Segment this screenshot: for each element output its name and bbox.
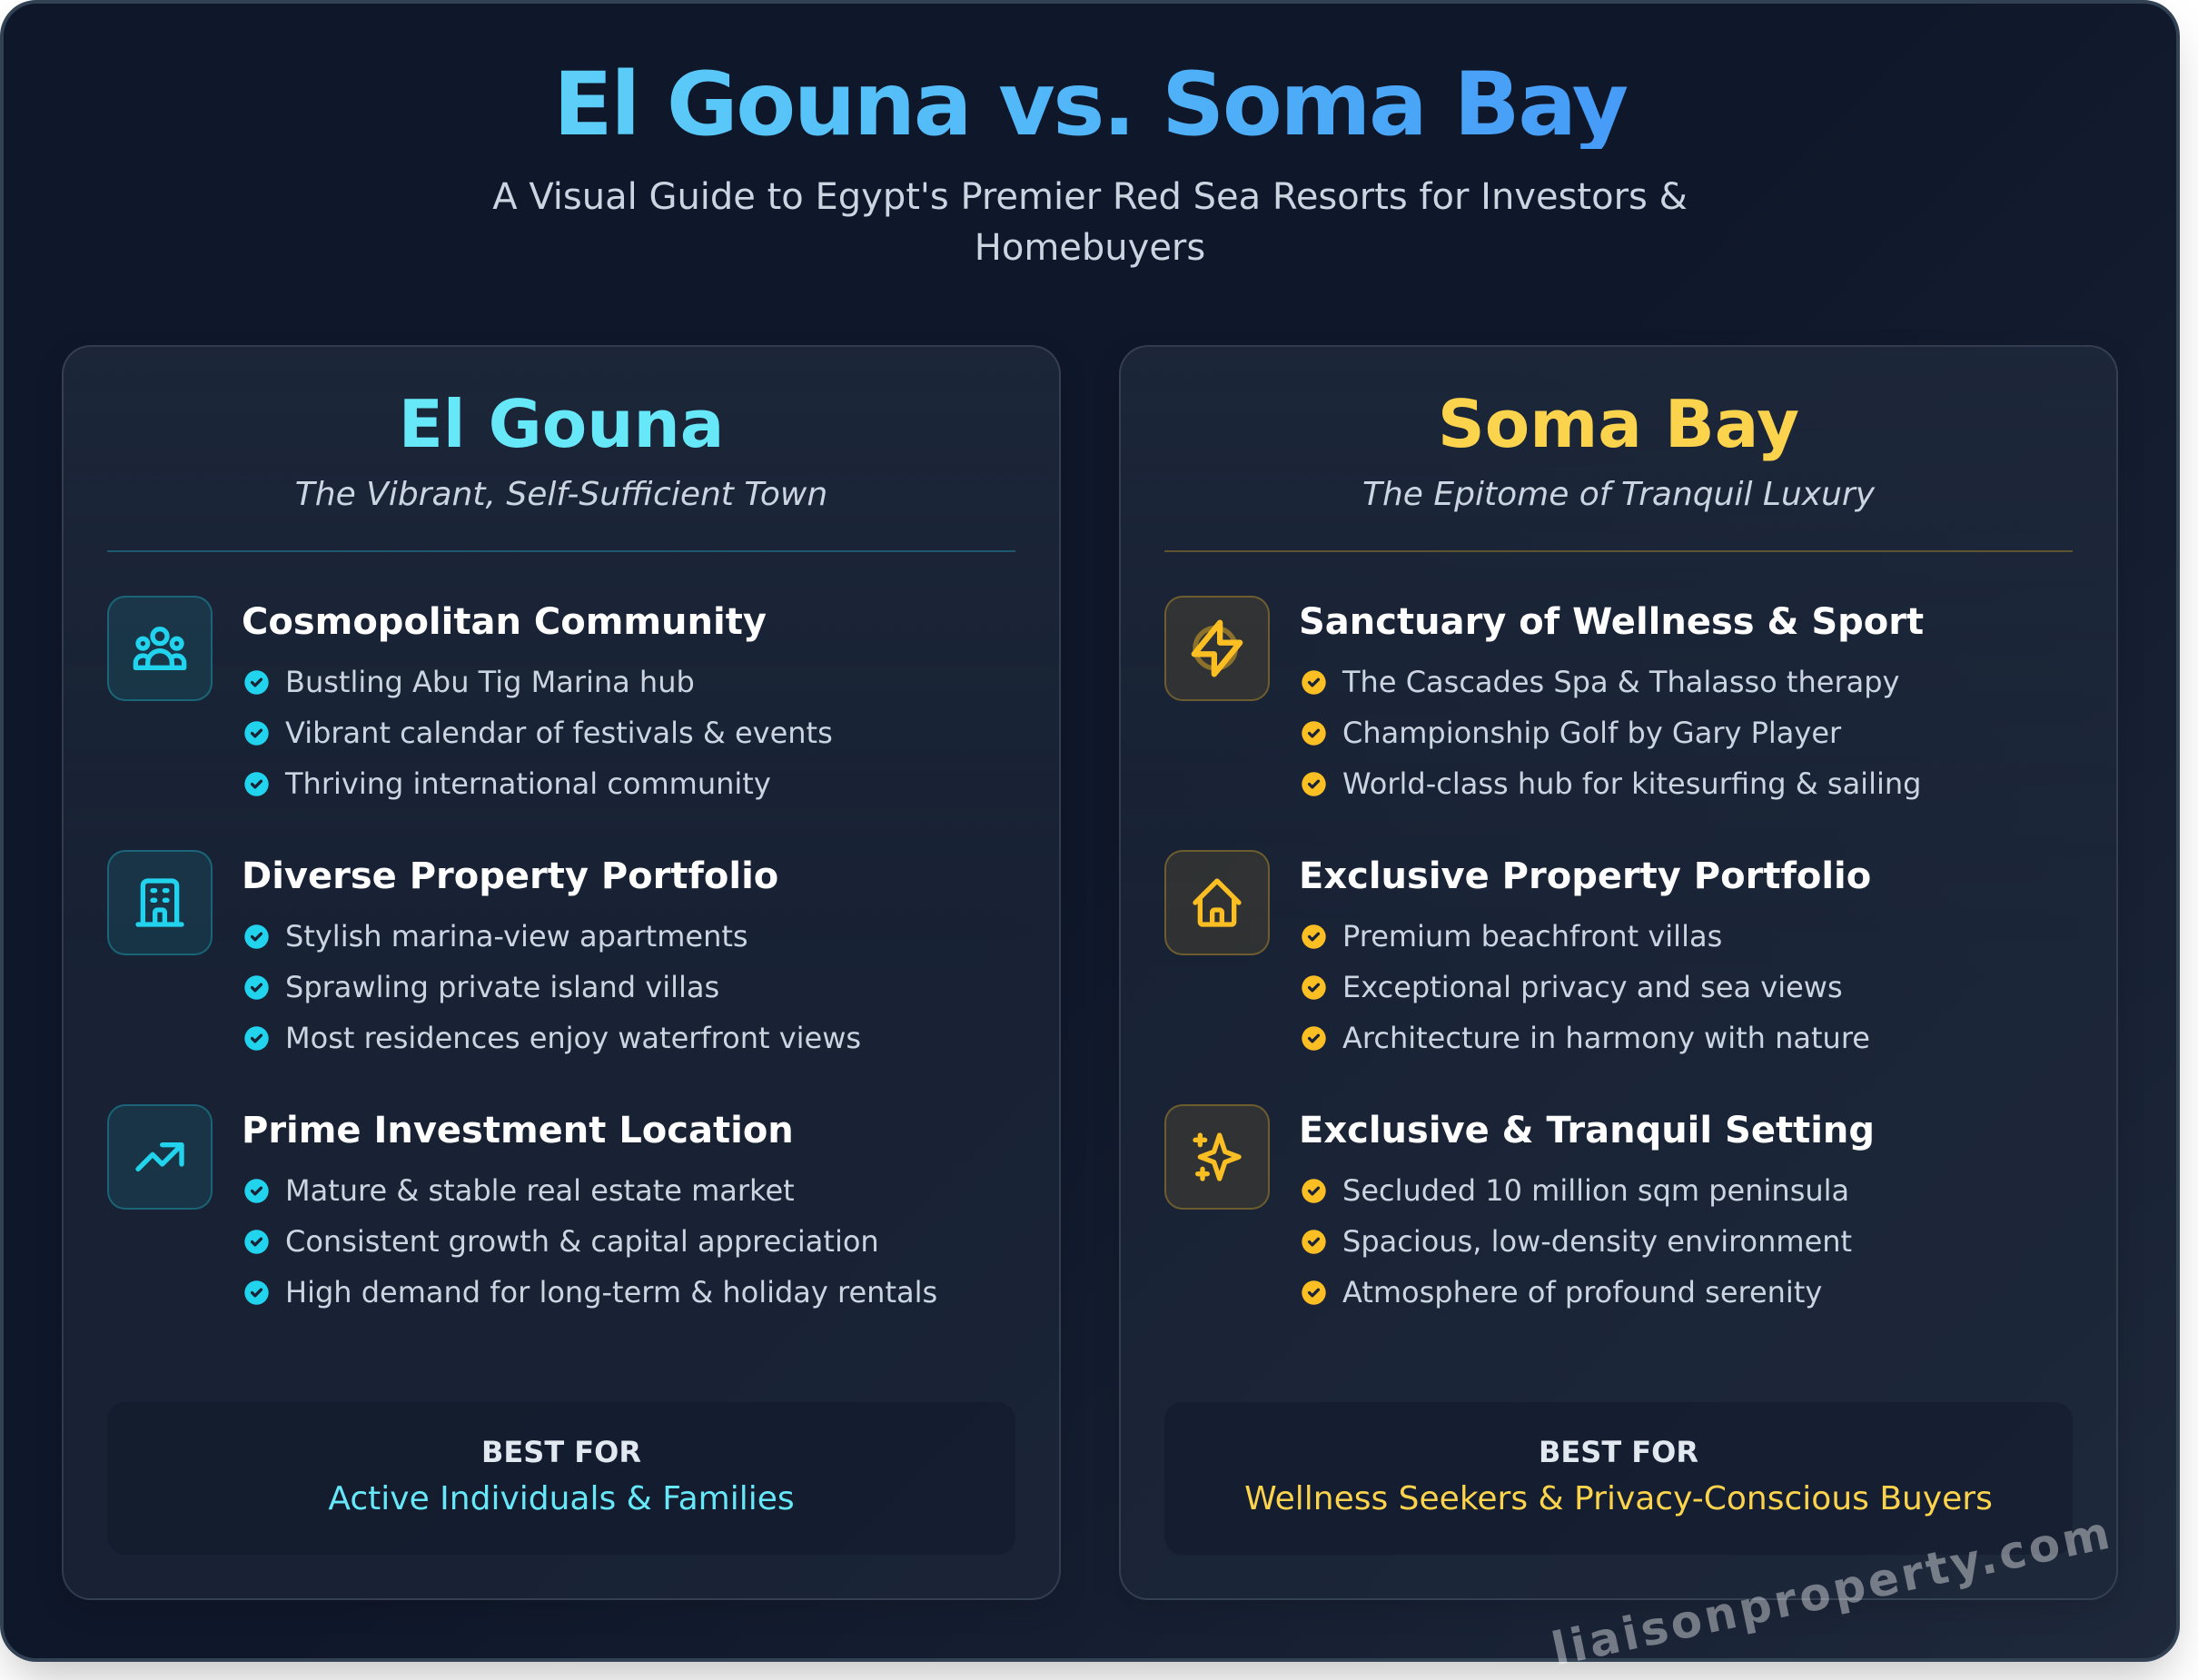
feature heading: Exclusive & Tranquil Setting: [1299, 1110, 1875, 1151]
list item: Most residences enjoy waterfront views: [285, 1021, 861, 1055]
list item: Exceptional privacy and sea views: [1342, 970, 1843, 1004]
feature: Exclusive Property Portfolio: [1164, 850, 1871, 1055]
callout: best for El Gouna: [107, 1402, 1015, 1555]
icon: trending up: [107, 1104, 213, 1210]
callout: best for Soma Bay: [1164, 1402, 2073, 1555]
callout label: BEST FOR: [1539, 1435, 1698, 1469]
list item: World-class hub for kitesurfing & sailing: [1342, 766, 1921, 801]
subtitle: Homebuyers: [975, 227, 1205, 269]
list item: Stylish marina-view apartments: [285, 919, 748, 954]
heading: Soma Bay: Soma Bay: [1438, 386, 1799, 462]
feature heading: Cosmopolitan Community: [242, 601, 767, 643]
list item: Bustling Abu Tig Marina hub: [285, 665, 695, 699]
list item: Sprawling private island villas: [285, 970, 719, 1004]
feature heading: Diverse Property Portfolio: [242, 855, 778, 897]
panel: Soma Bay: [1119, 345, 2118, 1600]
callout value: Wellness Seekers & Privacy-Conscious Buyers: [1244, 1480, 1993, 1517]
icon: lightning bolt: [1164, 596, 1270, 701]
list item: Vibrant calendar of festivals & events: [285, 716, 833, 750]
feature heading: Prime Investment Location: [242, 1110, 794, 1151]
icon: people: [107, 596, 213, 701]
feature: Sanctuary of Wellness & Sport: [1164, 596, 1924, 801]
icon: sparkles: [1164, 1104, 1270, 1210]
list item: Championship Golf by Gary Player: [1342, 716, 1841, 750]
callout label: BEST FOR: [481, 1435, 641, 1469]
list item: Spacious, low-density environment: [1342, 1224, 1852, 1259]
feature heading: Exclusive Property Portfolio: [1299, 855, 1871, 897]
title: El Gouna vs. Soma Bay: [553, 53, 1627, 154]
tagline: El Gouna: The Vibrant, Self-Sufficient Town: [295, 476, 827, 512]
list item: The Cascades Spa & Thalasso therapy: [1342, 665, 1899, 699]
list item: Architecture in harmony with nature: [1342, 1021, 1870, 1055]
icon: building: [107, 850, 213, 955]
list item: Premium beachfront villas: [1342, 919, 1722, 954]
tagline: Soma Bay: The Epitome of Tranquil Luxury: [1362, 476, 1875, 512]
list item: Atmosphere of profound serenity: [1342, 1275, 1822, 1309]
list item: Consistent growth & capital appreciation: [285, 1224, 879, 1259]
list item: Mature & stable real estate market: [285, 1173, 795, 1208]
list item: High demand for long-term & holiday rentals: [285, 1275, 937, 1309]
list item: Thriving international community: [285, 766, 771, 801]
feature: Cosmopolitan Community: [107, 596, 833, 801]
list item: Secluded 10 million sqm peninsula: [1342, 1173, 1849, 1208]
feature: Diverse Property Portfolio: [107, 850, 861, 1055]
feature: Exclusive & Tranquil Setting: [1164, 1104, 1875, 1309]
callout value: Active Individuals & Families: [328, 1480, 795, 1517]
feature heading: Sanctuary of Wellness & Sport: [1299, 601, 1924, 643]
icon: house: [1164, 850, 1270, 955]
heading: El Gouna: El Gouna: [399, 386, 724, 462]
feature: Prime Investment Location: [107, 1104, 937, 1309]
subtitle: A Visual Guide to Egypt's Premier Red Sea Resorts for Investors &: [492, 176, 1688, 218]
watermark: liaisonproperty.com: [1547, 1506, 2117, 1675]
subtitle: [492, 176, 1688, 269]
panel: El Gouna: [62, 345, 1061, 1600]
